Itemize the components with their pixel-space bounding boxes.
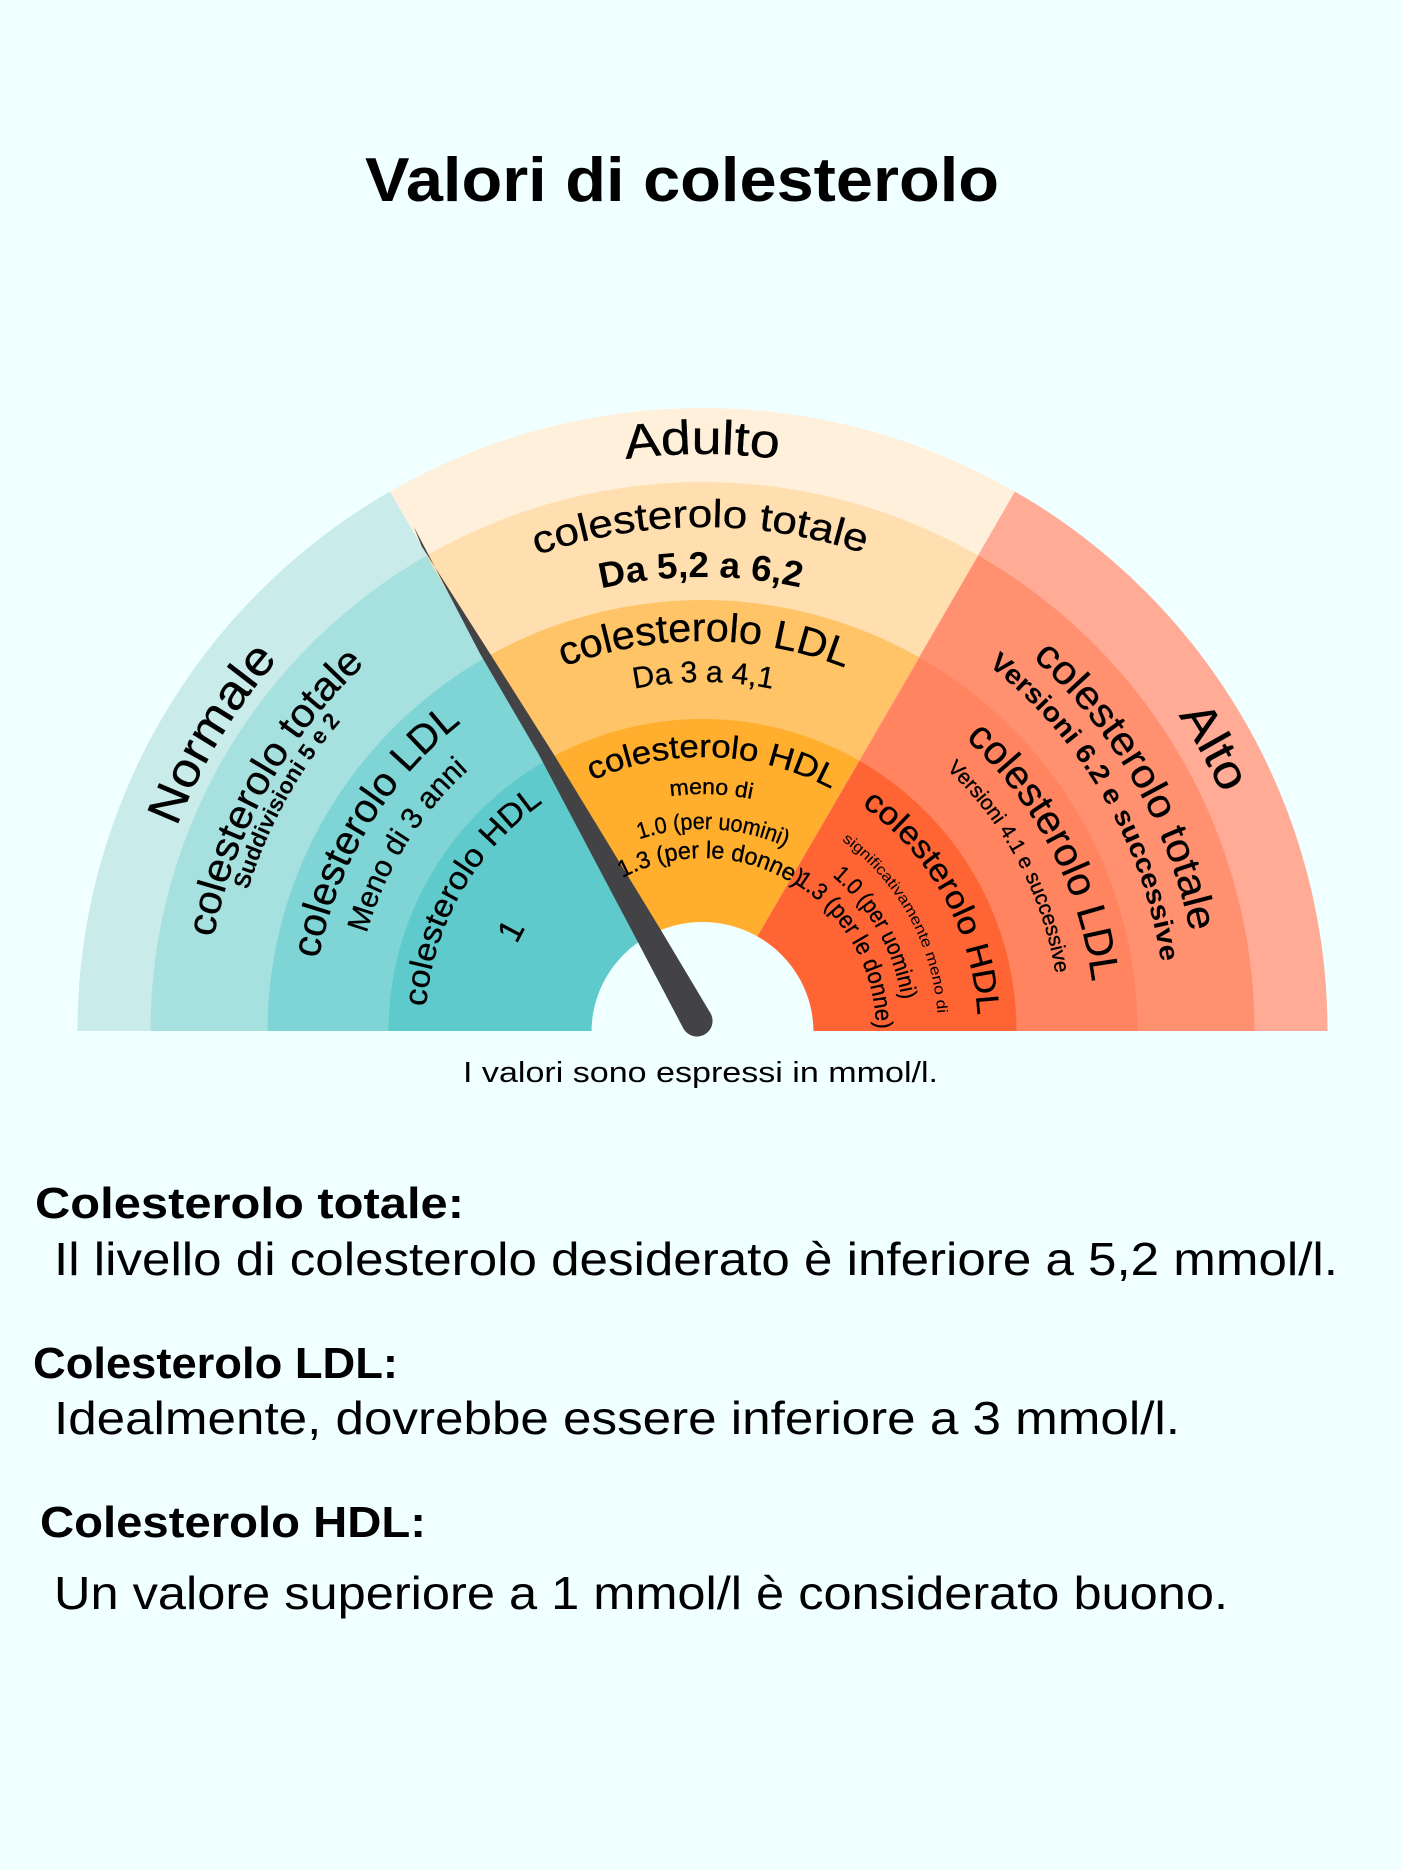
text block: colesterolo HDL	[40, 1498, 1228, 1619]
alto HDL qualifier: significativamente meno di	[843, 836, 948, 1012]
normale colesterolo totale: colesterolo totale	[194, 653, 361, 934]
alto colesterolo LDL: colesterolo LDL	[970, 728, 1118, 981]
adulto label: Adulto	[626, 419, 778, 460]
panel: normale segment rings	[78, 492, 702, 1031]
alto HDL men value: 1.0 (per uomini)	[833, 867, 918, 998]
heading: colesterolo LDL: Colesterolo LDL:	[33, 1339, 398, 1388]
units note: I valori sono espressi in mmol/l.	[463, 1057, 938, 1089]
text block: colesterolo LDL	[33, 1339, 1180, 1444]
alto HDL women value: 1.3 (per le donne)	[796, 872, 894, 1028]
alto label: Alto	[1178, 710, 1241, 789]
body: colesterolo totale: Il livello di colesterolo desiderato è inferiore a 5,2 mmol/l.	[54, 1233, 1338, 1285]
normale colesterolo totale value: Suddivisioni 5 e 2	[234, 714, 340, 888]
normale HDL value: 1	[490, 914, 533, 948]
title: Valori di colesterolo	[365, 146, 999, 215]
normale label: Normale	[148, 648, 274, 824]
normale LDL value: Meno di 3 anni	[347, 755, 468, 932]
alto LDL value: Versioni 4.1 e successive	[950, 758, 1066, 972]
adulto HDL qualifier: meno di	[670, 782, 754, 799]
gauge centre hole	[592, 922, 814, 1032]
body: colesterolo HDL: Un valore superiore a 1 mmol/l è considerato buono.	[54, 1567, 1228, 1619]
panel: alto segment rings	[702, 492, 1328, 1031]
heading: colesterolo HDL: Colesterolo HDL:	[40, 1498, 426, 1547]
adulto colesterolo totale value: Da 5,2 a 6,2	[598, 552, 802, 588]
heading: colesterolo totale: Colesterolo totale:	[35, 1179, 464, 1228]
alto colesterolo totale value: Versioni 6.2 e successive	[994, 650, 1174, 960]
adulto HDL men value: 1.0 (per uomini)	[637, 814, 788, 850]
gauge needle	[414, 527, 713, 1037]
adulto colesterolo totale: colesterolo totale	[534, 498, 866, 553]
normale colesterolo LDL: colesterolo LDL	[299, 711, 460, 956]
adulto LDL value: Da 3 a 4,1	[633, 661, 772, 690]
text block: colesterolo totale	[35, 1179, 1338, 1285]
normale colesterolo HDL: colesterolo HDL	[409, 792, 542, 1005]
gauge chart	[78, 408, 1328, 1036]
adulto HDL women value: 1.3 (per le donne)	[618, 840, 802, 888]
adulto colesterolo LDL: colesterolo LDL	[560, 612, 845, 668]
adulto colesterolo HDL: colesterolo HDL	[589, 735, 832, 789]
body: colesterolo LDL: Idealmente, dovrebbe essere inferiore a 3 mmol/l.	[54, 1392, 1180, 1444]
panel: adulto segment rings	[390, 408, 1015, 1031]
alto colesterolo HDL: colesterolo HDL	[865, 795, 999, 1014]
alto colesterolo totale: colesterolo totale	[1037, 646, 1212, 929]
